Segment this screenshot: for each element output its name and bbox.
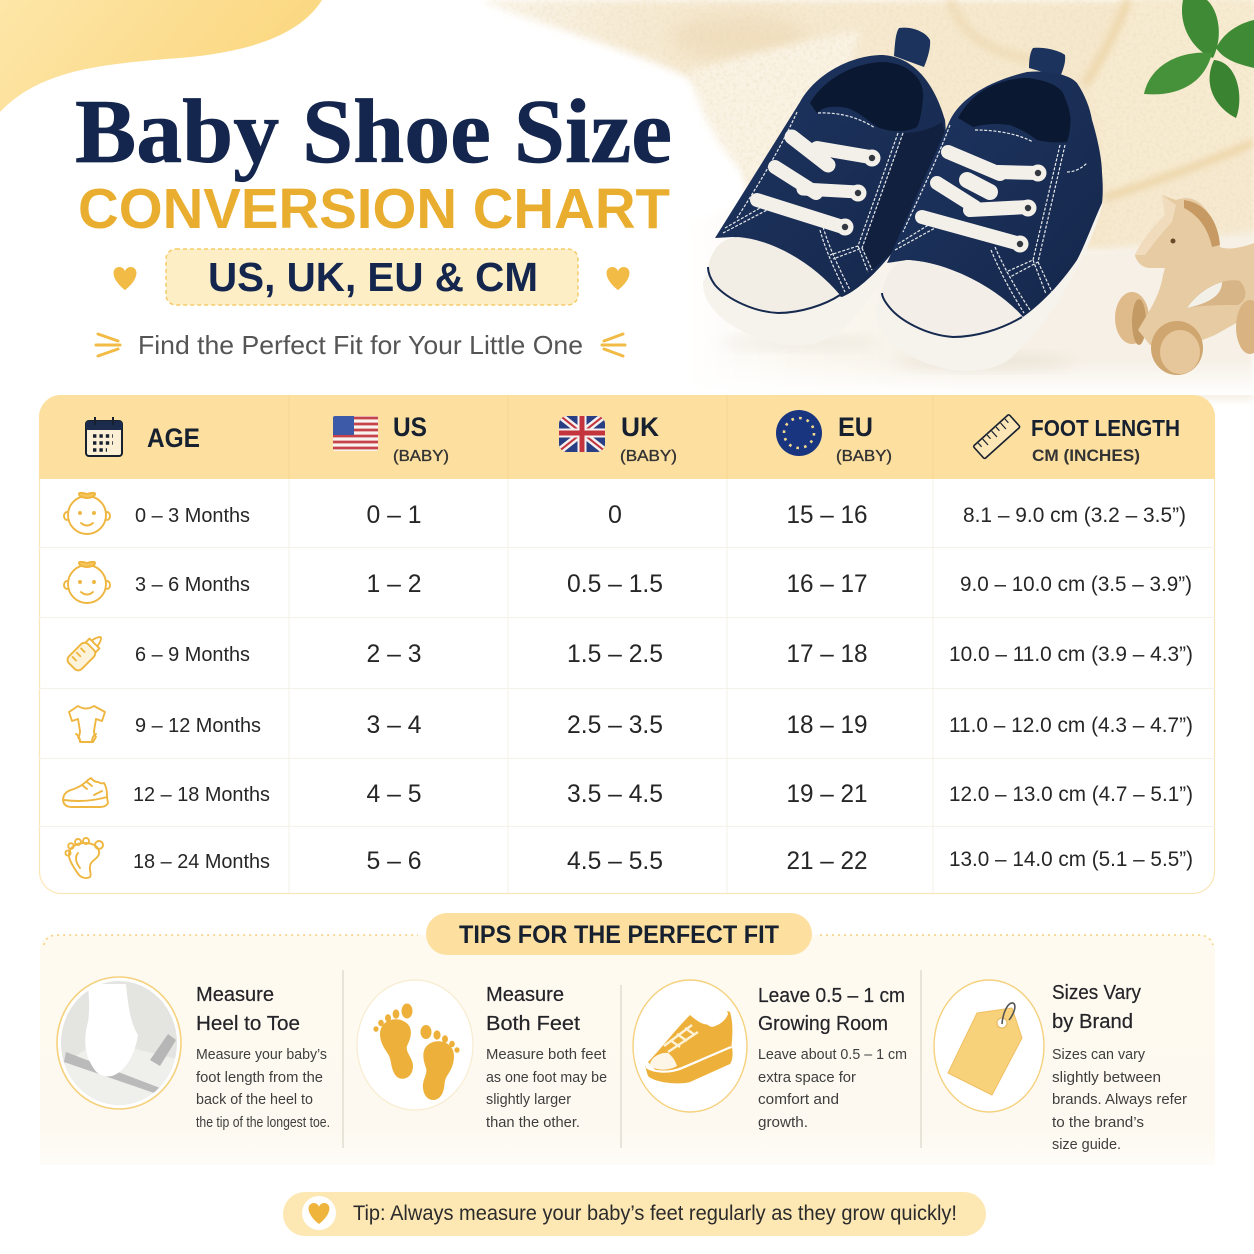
icon: baby bottle	[65, 631, 107, 673]
icon: baby foot	[65, 838, 103, 878]
wooden horse toy	[1115, 195, 1254, 375]
row: 0–3 months	[64, 493, 1186, 534]
tip: measure both feet: Both Feet	[486, 1013, 580, 1035]
tip: measure heel to toe	[55, 977, 330, 1131]
header: UK: UK	[621, 412, 659, 442]
row: 18–24 months: 18 – 24 Months	[133, 851, 270, 873]
row: 18–24 months: 4.5 – 5.5	[567, 847, 663, 875]
tip: measure both feet: Measure	[486, 984, 564, 1006]
icon: US flag	[333, 416, 378, 451]
row: 9–12 months: 2.5 – 3.5	[567, 711, 663, 739]
row: 12–18 months	[63, 778, 1193, 808]
icon: left heart	[114, 267, 136, 290]
tip: sizes vary by brand: to the brand’s	[1052, 1115, 1144, 1131]
shoe shadows	[720, 336, 1075, 370]
header: US	[393, 412, 449, 465]
icon: UK flag	[559, 416, 605, 452]
tip: measure heel to toe: back of the heel to	[196, 1092, 313, 1108]
yellow corner blob	[0, 0, 322, 112]
right shoe toe cap	[882, 260, 1022, 337]
tip: growing room: Leave 0.5 – 1 cm	[758, 985, 905, 1007]
tip: measure both feet: than the other.	[486, 1115, 580, 1131]
header: US: US	[393, 412, 427, 442]
row: 12–18 months: 4 – 5	[366, 780, 422, 808]
row: 0–3 months: 15 – 16	[786, 501, 868, 529]
row: 18–24 months: 13.0 – 14.0 cm (5.1 – 5.5”)	[949, 848, 1193, 871]
left shoe	[703, 28, 946, 346]
tip: growing room: growth.	[758, 1115, 808, 1131]
tip: sizes vary by brand: Sizes can vary	[1052, 1047, 1146, 1063]
badge: US, UK, EU & CM: US, UK, EU & CM	[208, 254, 538, 300]
tip: sizes vary by brand	[934, 980, 1187, 1153]
header: US: (BABY)	[393, 448, 449, 465]
row: 9–12 months	[69, 706, 1193, 742]
header: age: AGE	[147, 423, 200, 453]
row: 6–9 months: 2 – 3	[366, 640, 422, 668]
photo: baby shoes on blanket	[480, 0, 1254, 400]
row: 9–12 months: 18 – 19	[786, 711, 868, 739]
size conversion table	[39, 395, 1215, 894]
row: 18–24 months	[65, 838, 1193, 878]
header: UK: (BABY)	[620, 448, 677, 465]
row: 9–12 months: 11.0 – 12.0 cm (4.3 – 4.7”)	[949, 714, 1193, 737]
bottom tip pill: Tip: Always measure your baby’s feet regularly as they grow quickly!	[353, 1202, 957, 1225]
tip: growing room: Growing Room	[758, 1013, 888, 1035]
tip: measure heel to toe: foot length from the	[196, 1070, 323, 1086]
row: 3–6 months: 0.5 – 1.5	[567, 570, 663, 598]
icon: ruler	[973, 414, 1020, 459]
tip: sizes vary by brand: by Brand	[1052, 1011, 1133, 1033]
row: 18–24 months: 5 – 6	[366, 847, 422, 875]
row: 12–18 months: 12 – 18 Months	[133, 784, 270, 806]
row: 3–6 months: 16 – 17	[786, 570, 868, 598]
image: foot on ruler	[55, 977, 181, 1110]
leaves	[1144, 0, 1254, 118]
row: 3–6 months: 3 – 6 Months	[135, 574, 250, 596]
blanket	[480, 0, 1254, 252]
tips heading pill: TIPS FOR THE PERFECT FIT	[459, 921, 779, 949]
tip: sizes vary by brand: slightly between	[1052, 1070, 1161, 1086]
right shoe	[875, 48, 1103, 371]
row: 6–9 months: 1.5 – 2.5	[567, 640, 663, 668]
surface	[680, 200, 1254, 400]
tagline: Find the Perfect Fit for Your Little One	[138, 330, 583, 360]
icon: heart	[309, 1203, 329, 1224]
row: 12–18 months: 19 – 21	[786, 780, 868, 808]
tip: measure heel to toe: Heel to Toe	[196, 1013, 300, 1035]
header: EU: EU	[838, 412, 873, 442]
tip: sizes vary by brand: brands. Always refer	[1052, 1092, 1187, 1108]
tip: measure both feet: as one foot may be	[486, 1070, 607, 1086]
tip: measure heel to toe: Measure your baby’s	[196, 1047, 327, 1063]
row: 6–9 months: 10.0 – 11.0 cm (3.9 – 4.3”)	[949, 643, 1193, 666]
icon: right sparks	[602, 334, 625, 356]
icon: left sparks	[96, 334, 120, 356]
tips heading pill	[426, 913, 812, 955]
row: 0–3 months: 0	[608, 501, 622, 529]
header: foot length: CM (INCHES)	[1032, 446, 1140, 465]
tip: growing room	[633, 980, 907, 1131]
tip: measure heel to toe: Measure	[196, 984, 274, 1006]
row: 12–18 months: 3.5 – 4.5	[567, 780, 663, 808]
header: EU	[836, 412, 892, 465]
subtitle: conversion chart: CONVERSION CHART	[78, 177, 670, 241]
tip: measure both feet: Measure both feet	[486, 1047, 606, 1063]
icon: gold sneaker	[633, 980, 747, 1112]
badge: US, UK, EU & CM	[166, 249, 578, 305]
tip: growing room: extra space for	[758, 1070, 856, 1086]
tip: sizes vary by brand: size guide.	[1052, 1137, 1121, 1153]
row: 0–3 months: 0 – 3 Months	[135, 505, 250, 527]
left shoe toe cap	[708, 237, 840, 313]
table header	[39, 395, 1215, 479]
title: Baby Shoe Size	[75, 81, 672, 182]
row: 3–6 months: 1 – 2	[366, 570, 422, 598]
icon: baby face	[64, 562, 110, 603]
panel: tips background	[40, 935, 1215, 1165]
icon: baby onesie	[69, 706, 105, 742]
icon: baby face	[64, 493, 110, 534]
icon: EU flag	[776, 410, 822, 456]
header: UK	[620, 412, 677, 465]
header: EU: (BABY)	[836, 448, 892, 465]
row: 18–24 months: 21 – 22	[786, 847, 868, 875]
row: 3–6 months	[64, 562, 1192, 603]
row: 0–3 months: 8.1 – 9.0 cm (3.2 – 3.5”)	[963, 504, 1186, 527]
row: 12–18 months: 12.0 – 13.0 cm (4.7 – 5.1”)	[949, 783, 1193, 806]
tip: measure both feet: slightly larger	[486, 1092, 571, 1108]
tip: growing room: Leave about 0.5 – 1 cm	[758, 1047, 907, 1063]
row: 9–12 months: 9 – 12 Months	[135, 715, 261, 737]
header: foot length: FOOT LENGTH	[1031, 415, 1180, 441]
bottom tip pill	[283, 1192, 986, 1236]
row: 9–12 months: 3 – 4	[366, 711, 422, 739]
icon: gold tag	[934, 980, 1044, 1112]
row: 6–9 months: 17 – 18	[786, 640, 868, 668]
row: 6–9 months	[65, 631, 1193, 673]
tip: sizes vary by brand: Sizes Vary	[1052, 982, 1141, 1004]
tip: growing room: comfort and	[758, 1092, 839, 1108]
icon: right heart	[607, 267, 629, 290]
header: foot length	[1031, 415, 1180, 465]
row: 6–9 months: 6 – 9 Months	[135, 644, 250, 666]
icon: footprints	[357, 980, 473, 1110]
tip: measure both feet	[357, 980, 607, 1131]
icon: sneaker	[63, 778, 108, 807]
row: 3–6 months: 9.0 – 10.0 cm (3.5 – 3.9”)	[960, 573, 1192, 596]
icon: calendar	[86, 417, 122, 456]
row: 0–3 months: 0 – 1	[366, 501, 422, 529]
tip: measure heel to toe: the tip of the longest toe.	[196, 1115, 330, 1131]
